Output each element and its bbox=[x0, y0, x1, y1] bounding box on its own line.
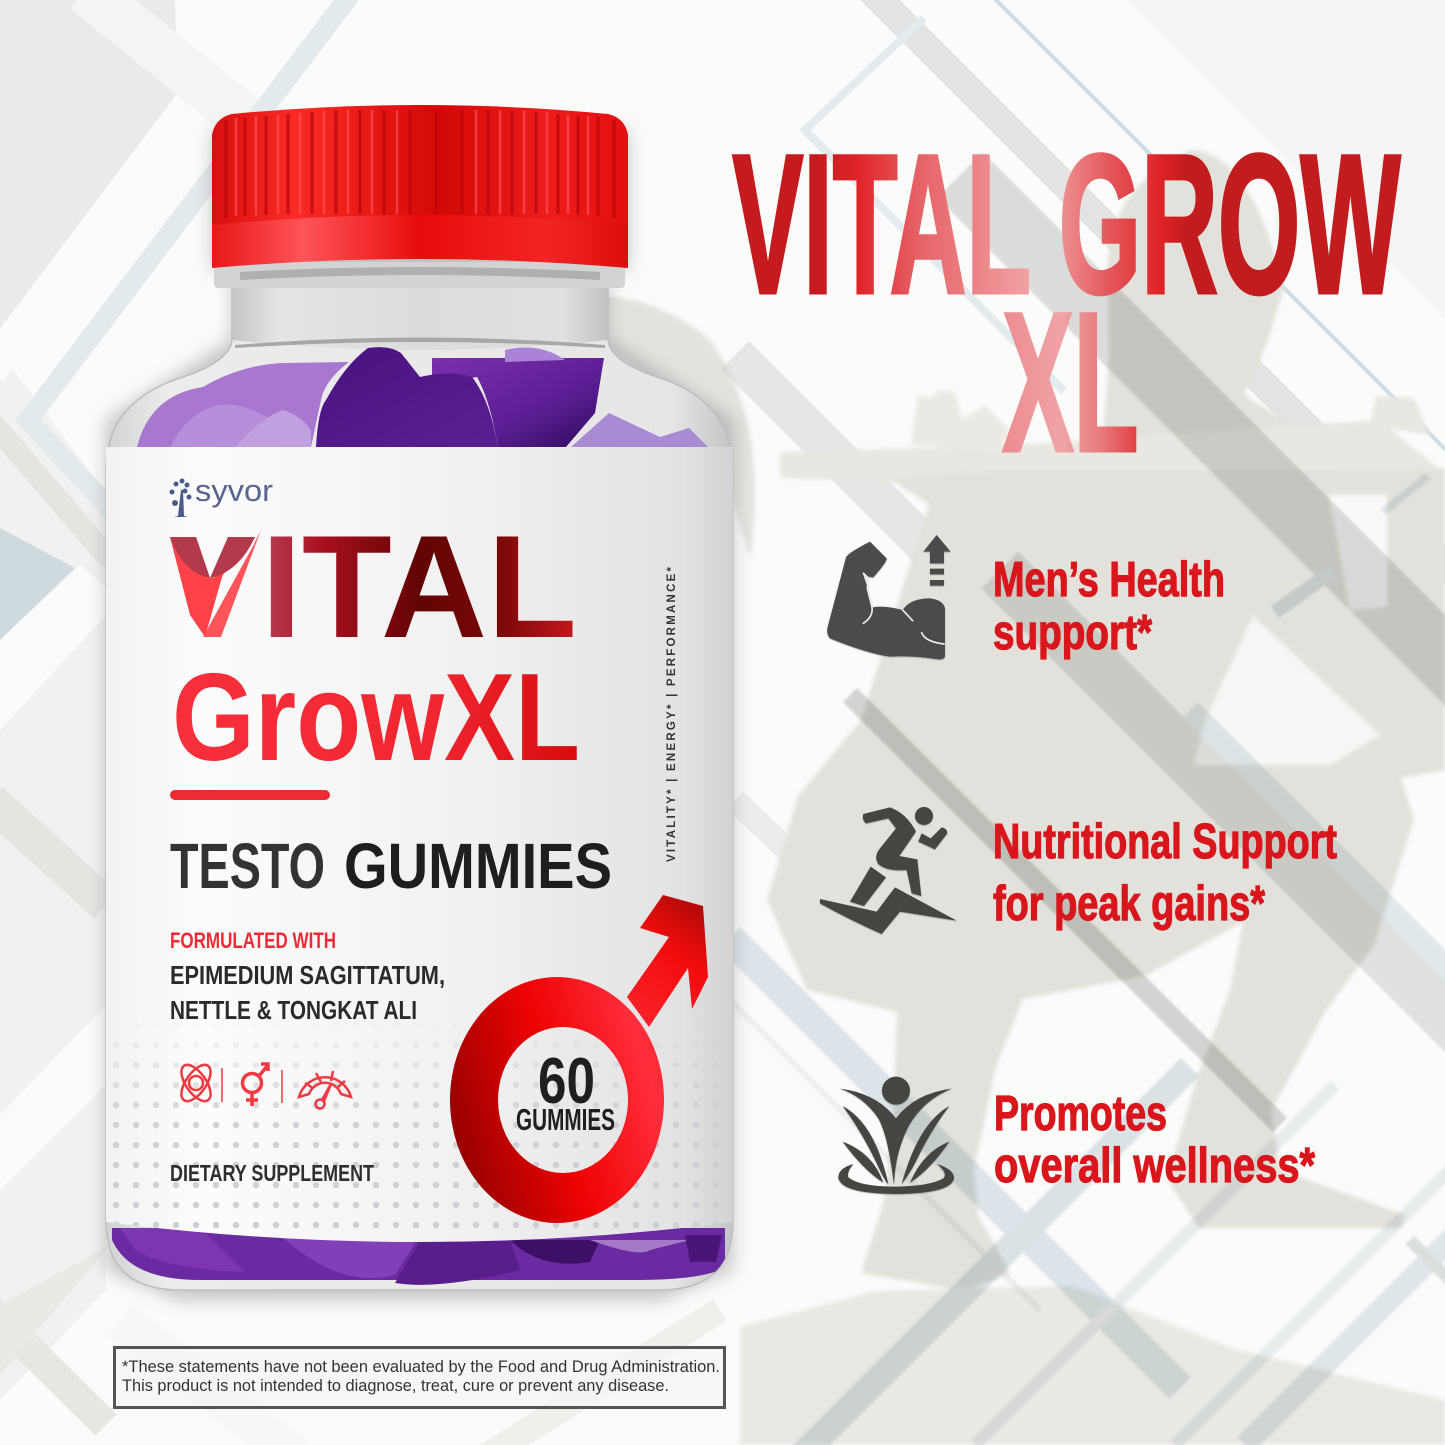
ingredients bbox=[170, 928, 445, 1025]
benefit text bbox=[994, 1087, 1316, 1193]
title: XL bbox=[1002, 272, 1138, 492]
left panels bbox=[0, 0, 178, 352]
disclaimer box: This product is not intended to diagnose, treat, cure or prevent any disease. bbox=[122, 1377, 669, 1395]
benefit text: Nutritional Support bbox=[993, 815, 1337, 869]
cap bbox=[212, 105, 628, 268]
TESTO GUMMIES: TESTO bbox=[170, 830, 325, 902]
benefit text bbox=[993, 815, 1337, 931]
label heading: VITAL: ITAL bbox=[261, 505, 577, 668]
benefit text: overall wellness* bbox=[994, 1139, 1316, 1193]
jar shadow bbox=[106, 130, 733, 1300]
benefit: nutritional support bbox=[820, 807, 1337, 934]
gummies bbox=[112, 347, 725, 1285]
gummy count bbox=[516, 1044, 615, 1137]
neck collar bbox=[232, 285, 608, 350]
icon: gauge bbox=[299, 1071, 351, 1108]
TESTO GUMMIES: GUMMIES bbox=[344, 830, 612, 902]
benefit: men's health bbox=[827, 535, 1225, 660]
benefit: overall wellness bbox=[838, 1077, 1316, 1194]
head bbox=[1100, 150, 1300, 470]
torso and legs bbox=[767, 468, 1445, 1291]
benefit text: support* bbox=[993, 606, 1153, 660]
disclaimer box bbox=[114, 1348, 724, 1408]
foreground diagonal bands bbox=[730, 175, 1445, 1445]
barbell and hands bbox=[780, 420, 1440, 500]
icon: wellness figure bbox=[838, 1077, 954, 1194]
benefit text: Men’s Health bbox=[993, 553, 1225, 607]
icon: tree bbox=[170, 478, 192, 517]
icon: runner bbox=[820, 807, 957, 934]
benefit text: Promotes bbox=[994, 1087, 1167, 1141]
icon: gender symbol bbox=[242, 1064, 268, 1106]
ingredients: EPIMEDIUM SAGITTATUM, bbox=[170, 960, 445, 990]
jar glass body bbox=[106, 270, 733, 1290]
icon: flexed arm bbox=[827, 535, 951, 659]
ingredients: NETTLE & TONGKAT ALI bbox=[170, 995, 417, 1025]
dot pattern bbox=[112, 1042, 719, 1242]
red underline bbox=[170, 790, 330, 800]
floor bbox=[740, 1286, 1445, 1445]
dietary supplement: DIETARY SUPPLEMENT bbox=[170, 1160, 374, 1186]
small label icons bbox=[176, 1060, 351, 1108]
far side bands under the silhouette bbox=[735, 0, 1445, 930]
brand logo: syvor: syvor bbox=[195, 473, 273, 508]
disclaimer box: *These statements have not been evaluated by the Food and Drug Administration. bbox=[122, 1358, 720, 1376]
label heading: Grow XL: GrowXL bbox=[172, 649, 580, 787]
vertical tagline: VITALITY* | ENERGY* | PERFORMANCE* bbox=[666, 566, 678, 862]
icon: atom bbox=[176, 1060, 216, 1106]
title bbox=[732, 114, 1401, 492]
benefit text: for peak gains* bbox=[993, 877, 1266, 931]
brand logo: syvor bbox=[170, 473, 273, 517]
background silhouette: athlete squatting bbox=[740, 150, 1445, 1445]
gummy count: GUMMIES bbox=[516, 1102, 615, 1137]
product jar bbox=[106, 105, 733, 1300]
male symbol badge bbox=[450, 895, 708, 1223]
light gaps around the arm bbox=[1329, 495, 1387, 610]
ingredients: FORMULATED WITH bbox=[170, 928, 336, 953]
gummy count: 60 bbox=[538, 1044, 595, 1117]
benefit text bbox=[993, 553, 1225, 660]
TESTO GUMMIES bbox=[170, 830, 612, 902]
label bbox=[106, 447, 733, 1242]
icon: up arrow bbox=[923, 535, 951, 563]
